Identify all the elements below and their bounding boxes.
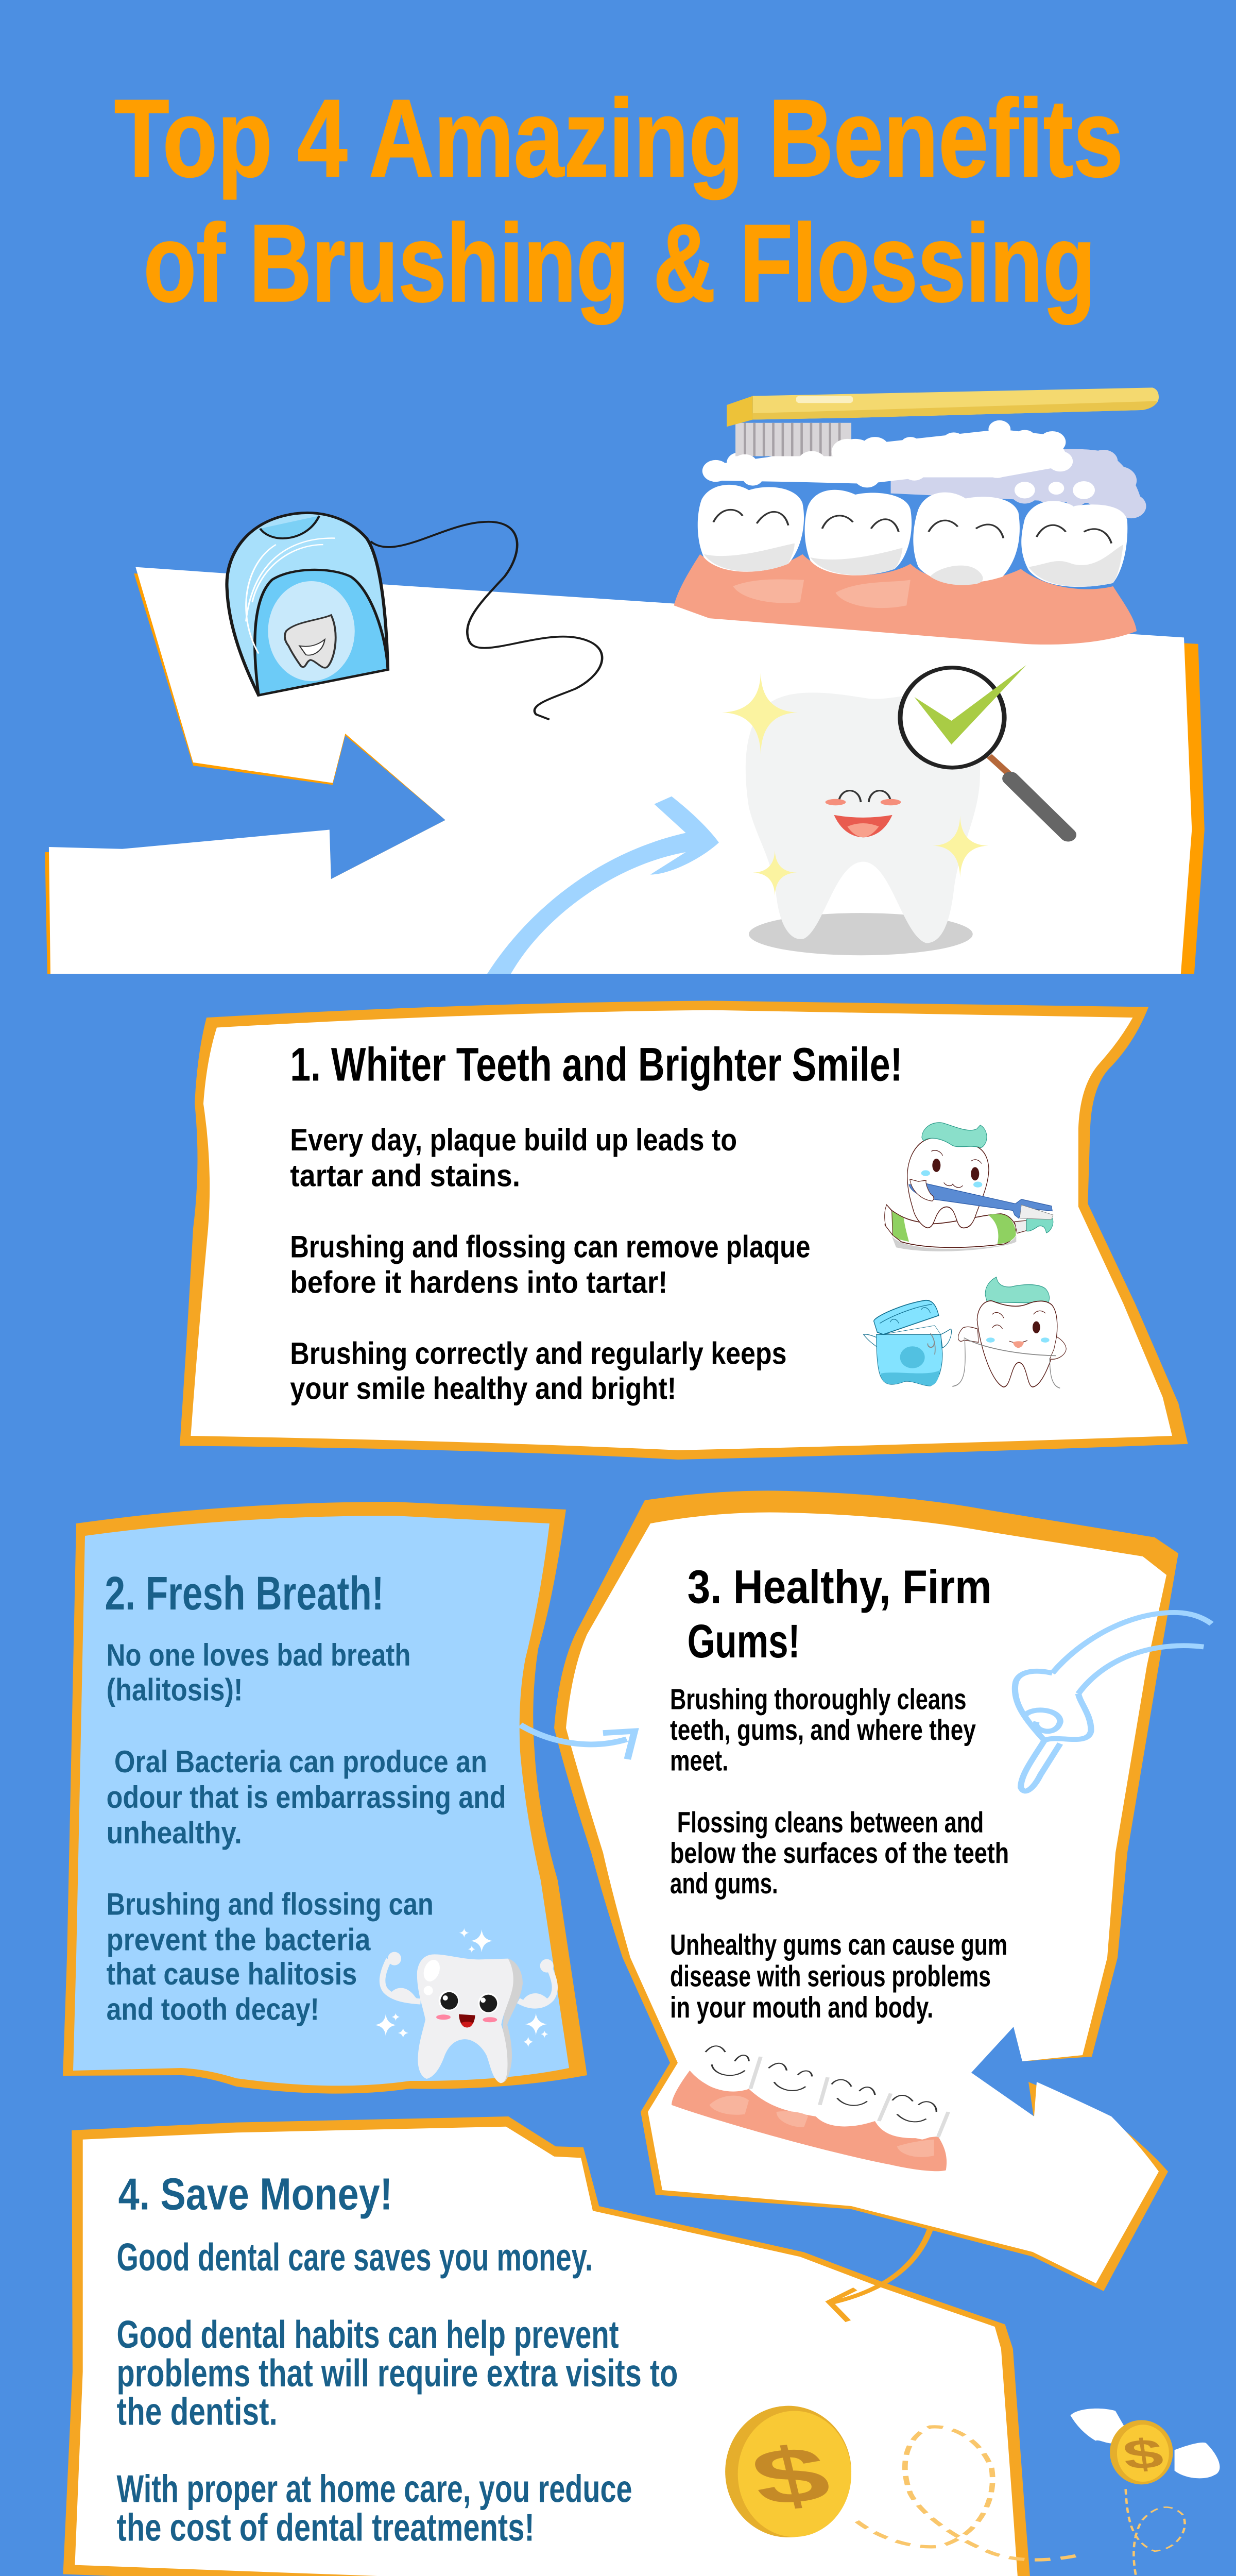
icon: smiling tooth <box>722 673 988 955</box>
dashed flying coin trail <box>1126 2489 1185 2576</box>
icon: flying coin <box>1071 2409 1220 2484</box>
body text 3 <box>670 1683 1009 2024</box>
icon: floss box and winking tooth <box>864 1277 1066 1388</box>
arrow: light blue to box 3 <box>520 1725 634 1759</box>
body text 1: Brushing and flossing can remove plaque <box>290 1229 810 1264</box>
body text 2: odour that is embarrassing and <box>107 1780 506 1815</box>
icon: tooth brushing on toothpaste <box>885 1123 1053 1251</box>
icon: foam <box>702 420 1146 518</box>
body text 2: Oral Bacteria can produce an <box>114 1744 487 1779</box>
body text 4 <box>117 2236 678 2549</box>
box 3 fill <box>566 1512 1166 2283</box>
body text 4: Good dental habits can help prevent <box>117 2313 619 2357</box>
hero white banner <box>49 567 1192 974</box>
tooth body <box>907 1138 989 1228</box>
body text 3: teeth, gums, and where they <box>670 1713 976 1746</box>
box 1 fill <box>191 1010 1172 1450</box>
body text 2: Brushing and flossing can <box>107 1887 434 1922</box>
body text 2: and tooth decay! <box>107 1992 319 2027</box>
body text 3: below the surfaces of the teeth <box>670 1836 1009 1869</box>
light blue curved arrow <box>487 796 719 974</box>
heading 3: 3. Healthy, Firm <box>688 1561 991 1614</box>
box 2 border <box>63 1502 587 2094</box>
box 3 border <box>554 1490 1178 2291</box>
body text 3: Unhealthy gums can cause gum <box>670 1928 1007 1961</box>
body text 2: No one loves bad breath <box>107 1637 410 1672</box>
dashed coin trail <box>857 2427 1076 2560</box>
heading 3: Gums! <box>688 1615 800 1668</box>
icon: gums <box>674 554 1137 645</box>
panel: 4 save money <box>63 2116 1220 2576</box>
body text 1: Brushing correctly and regularly keeps <box>290 1336 787 1371</box>
toothpaste on head <box>922 1123 987 1147</box>
body text 2: (halitosis)! <box>107 1672 243 1707</box>
body text 1: before it hardens into tartar! <box>290 1265 667 1300</box>
panel: 2 fresh breath <box>63 1502 587 2094</box>
body text 2: that cause halitosis <box>107 1957 357 1991</box>
box 4 fill <box>75 2127 1019 2576</box>
icon: tilted gums and teeth <box>672 2042 948 2171</box>
hero orange edge <box>45 573 1205 974</box>
panel: 4 save money: 4. Save Money! <box>118 2169 392 2219</box>
box 2 fill <box>73 1516 569 2086</box>
winking tooth character <box>952 1277 1066 1388</box>
arrow: orange to box 4 <box>829 2229 930 2321</box>
icon: flying coin: $ <box>1120 2430 1166 2478</box>
icon: floss box <box>227 513 388 695</box>
body text 3: Flossing cleans between and <box>677 1806 984 1839</box>
icon: magnifier with check <box>900 665 1068 835</box>
body text 3: and gums. <box>670 1867 778 1900</box>
icon: floss outline <box>1015 1613 1212 1791</box>
icon: gold coin <box>725 2406 851 2537</box>
icon: gold coin: $ <box>743 2430 838 2522</box>
heading 2: 2. Fresh Breath! <box>105 1567 384 1620</box>
body text 2 <box>107 1637 506 2027</box>
panel: hero illustration <box>45 387 1205 974</box>
body text 3: Brushing thoroughly cleans <box>670 1683 967 1716</box>
box 4 border <box>63 2116 1033 2576</box>
icon: four teeth <box>698 485 1127 587</box>
body text 3: meet. <box>670 1744 728 1777</box>
body text 2: unhealthy. <box>107 1816 242 1850</box>
icon: toothbrush <box>727 387 1159 479</box>
face <box>921 1150 982 1188</box>
blue toothbrush <box>909 1179 1053 1219</box>
icon: floss thread <box>370 522 602 720</box>
title <box>114 76 1123 325</box>
icon: flexing tooth <box>374 1928 555 2083</box>
body text 1: tartar and stains. <box>290 1158 520 1193</box>
body text 1: your smile healthy and bright! <box>290 1371 676 1406</box>
body text 4: the cost of dental treatments! <box>117 2506 535 2549</box>
body text 4: the dentist. <box>117 2390 278 2433</box>
body text 1 <box>290 1123 810 1406</box>
panel: 3 healthy gums <box>554 1490 1212 2291</box>
floss box character <box>864 1300 951 1386</box>
toothpaste tube <box>885 1205 1053 1251</box>
body text 2: prevent the bacteria <box>107 1922 371 1957</box>
box 1 border <box>180 1001 1188 1460</box>
panel: 1 whiter teeth <box>180 1001 1188 1460</box>
body text 4: Good dental care saves you money. <box>117 2236 593 2279</box>
heading 3 <box>688 1561 991 1668</box>
body text 1: Every day, plaque build up leads to <box>290 1123 737 1157</box>
